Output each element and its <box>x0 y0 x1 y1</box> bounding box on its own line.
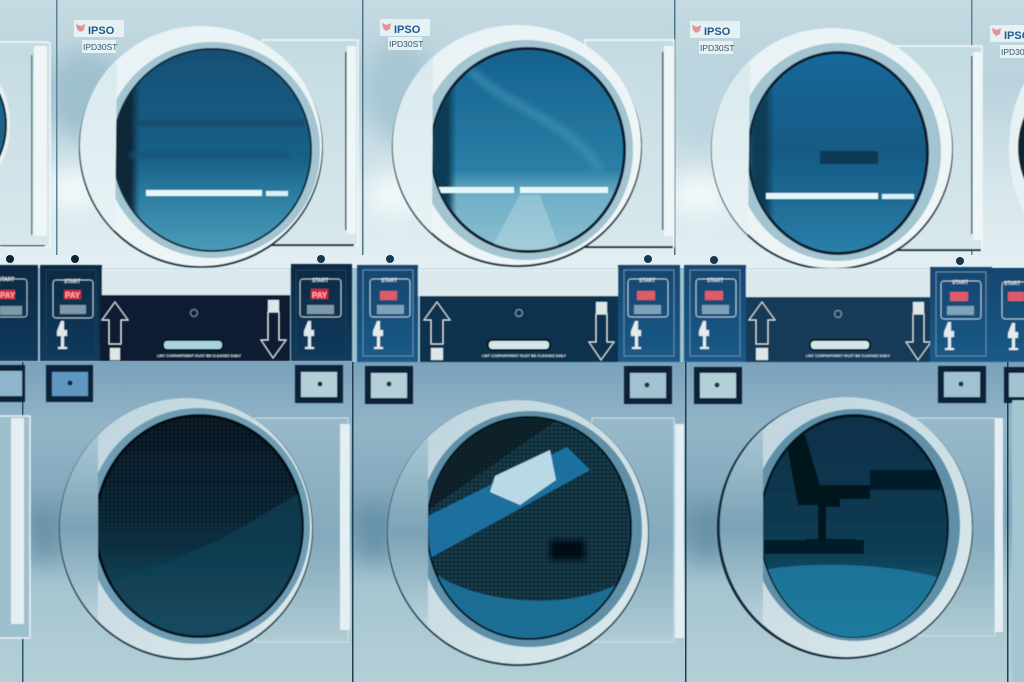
brand labels: IPD30ST <box>700 43 734 53</box>
partial dryer left <box>0 42 50 247</box>
door ring <box>711 30 953 270</box>
control panel 5: START <box>707 278 723 284</box>
dryer 3 <box>711 28 982 270</box>
partial washer right <box>1012 400 1024 682</box>
washer 3 <box>717 397 1003 659</box>
upper machine fronts <box>0 0 1024 268</box>
lint panel 1: LINT COMPARTMENT MUST BE CLEANED DAILY <box>157 354 242 358</box>
lint panel 1 <box>100 295 290 361</box>
control panel far right <box>992 268 1024 362</box>
interior <box>115 84 308 216</box>
control panel far left: PAY <box>0 291 16 300</box>
door flap <box>720 429 763 625</box>
lower machine fronts <box>0 362 1024 682</box>
control panel far left <box>0 265 38 361</box>
control panel 3 <box>357 265 418 362</box>
door flap <box>80 61 117 231</box>
interior: chair reflection <box>764 435 947 640</box>
door ring <box>59 398 313 660</box>
brand labels <box>74 19 1024 58</box>
control panel 6 <box>930 267 992 362</box>
control panel 2: START <box>312 278 328 284</box>
washer 1 <box>59 398 350 660</box>
brand labels: IPSO <box>704 26 731 38</box>
lint panel 3: LINT COMPARTMENT MUST BE CLEANED DAILY <box>806 354 891 358</box>
door flap <box>393 57 433 233</box>
interior <box>750 86 915 220</box>
partial washer left <box>0 416 30 638</box>
brand labels: IPD30ST <box>389 39 424 49</box>
control panel 1: PAY <box>65 291 81 300</box>
brand labels: IPSO <box>394 24 421 36</box>
dryer 1 <box>79 26 358 268</box>
lint panel 2: LINT COMPARTMENT MUST BE CLEANED DAILY <box>482 354 567 358</box>
door flap <box>388 437 428 627</box>
lint panel 3 <box>746 297 931 362</box>
control panel 5 <box>684 265 746 362</box>
screws <box>6 255 964 265</box>
door panel <box>592 418 674 642</box>
door ring <box>387 400 649 666</box>
lint panel 2 <box>420 296 618 362</box>
brand labels: IPD30ST <box>83 42 118 52</box>
control panel 1 <box>40 265 102 361</box>
control panel 4: START <box>639 278 655 284</box>
door ring <box>717 397 973 659</box>
dryer 2 <box>392 25 674 267</box>
control panel 2: PAY <box>312 291 328 300</box>
coin slot plates <box>0 365 1024 404</box>
door panel <box>262 40 358 245</box>
control panel 4 <box>618 265 680 362</box>
control panel 1: START <box>64 279 80 285</box>
interior <box>428 418 632 640</box>
door panel <box>255 418 348 642</box>
control panel 3: START <box>381 278 397 284</box>
washer 2 <box>387 400 684 666</box>
brand labels: IPSO <box>88 25 115 37</box>
door panel <box>915 418 995 636</box>
interior <box>96 416 306 640</box>
control panel 2 <box>291 264 352 361</box>
partial dryer right <box>1009 40 1024 256</box>
door panel <box>895 46 982 250</box>
door ring <box>79 28 323 268</box>
door flap <box>60 435 98 621</box>
interior <box>430 50 608 250</box>
door ring <box>392 27 642 267</box>
door panel <box>585 40 674 247</box>
control panel far right: START <box>1004 281 1020 287</box>
door flap <box>712 61 750 235</box>
control panel 6: START <box>952 280 968 286</box>
control band <box>0 264 1024 362</box>
